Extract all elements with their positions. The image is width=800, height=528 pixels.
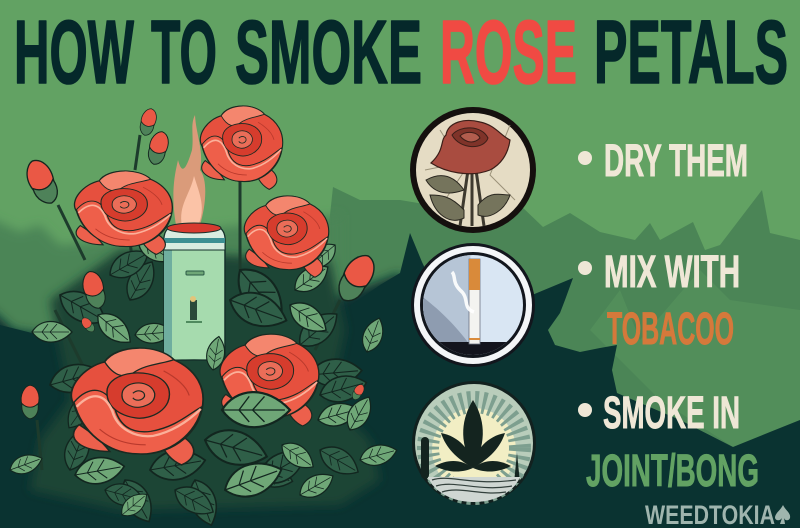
stems — [37, 135, 340, 470]
step: dry them — [578, 135, 748, 186]
leaf over lower right rose — [222, 392, 290, 427]
title: TO — [151, 3, 217, 103]
icon: cannabis medallion — [412, 381, 536, 505]
rose: top centre — [200, 106, 283, 189]
icon: cigarette medallion — [411, 243, 535, 367]
light foliage — [7, 231, 399, 521]
foliage backdrop — [30, 250, 380, 510]
flame — [173, 115, 205, 226]
icon: rose medallion — [410, 107, 536, 233]
illustration: roses and burning cylinder — [7, 106, 399, 528]
buds — [21, 107, 380, 419]
title: ROSE — [440, 3, 577, 103]
bullet list — [578, 135, 759, 496]
title — [14, 3, 788, 103]
title: SMOKE — [235, 3, 422, 103]
rose: right — [244, 196, 329, 277]
step: smoke in joint or bong — [578, 387, 759, 496]
rose: lower left — [71, 348, 203, 465]
leaves over cylinder — [204, 335, 227, 371]
title: HOW — [14, 3, 134, 103]
rose: upper left — [74, 171, 172, 254]
rose: lower right — [220, 334, 319, 426]
burning cylinder — [164, 223, 225, 360]
dark foliage — [46, 243, 370, 528]
step: mix with tobacco — [578, 246, 740, 354]
